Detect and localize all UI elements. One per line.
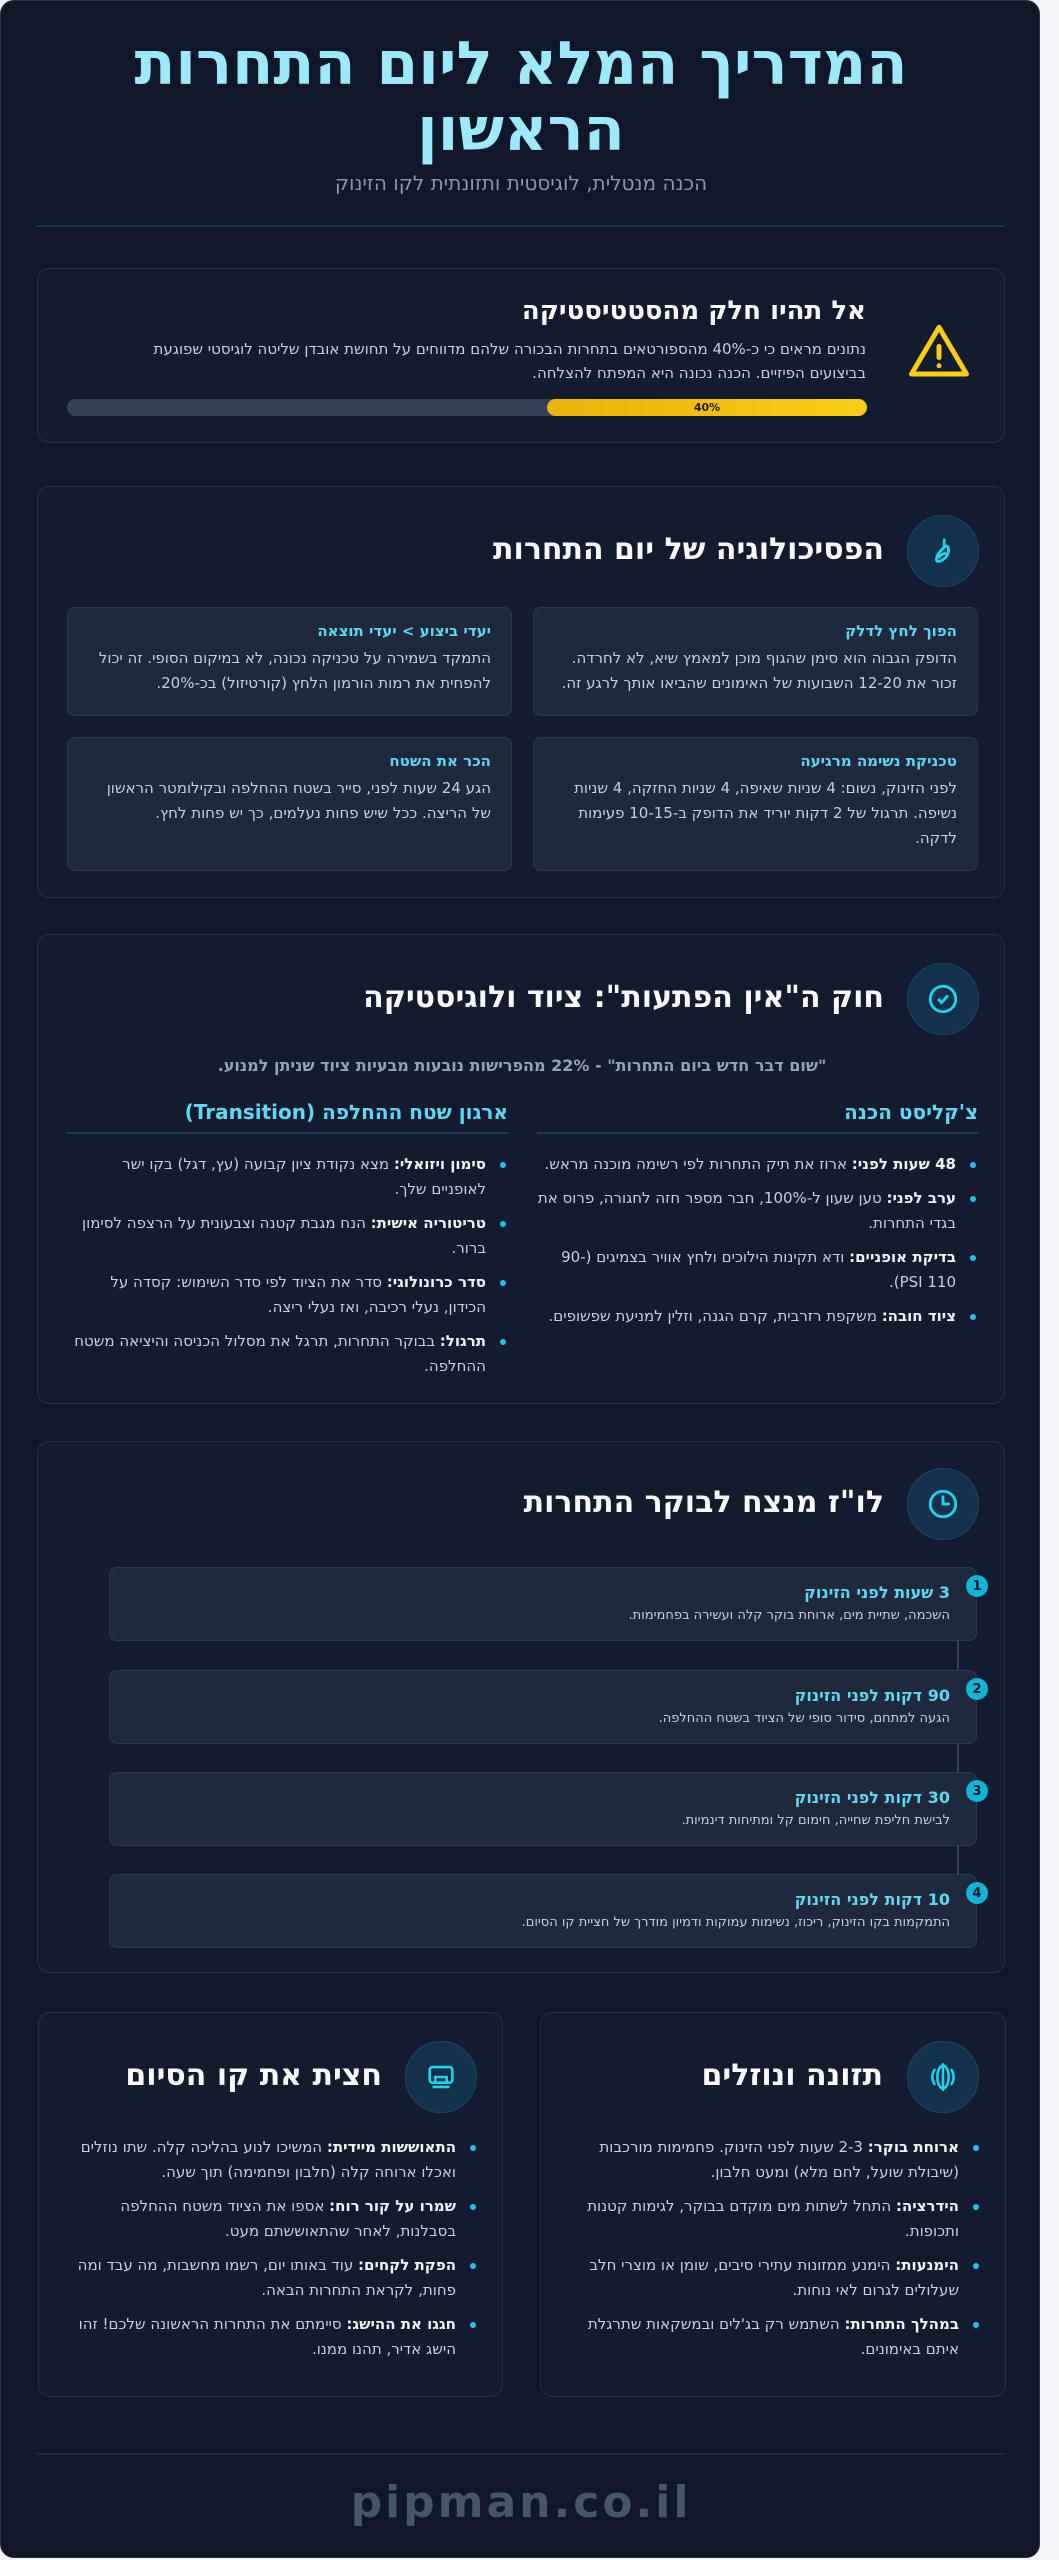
badge 4: 4 (972, 1886, 982, 1900)
heading: הפסיכולוגיה של יום התחרות (493, 532, 884, 567)
step 1: 3 שעות לפני הזינוק (804, 1583, 950, 1602)
icon: nutrition (907, 2041, 979, 2113)
bullets: שמרו על קור רוח: אספו את הציוד משטח ההחלפה בסבלנות, לאחר שהתאוששתם מעט. (120, 2197, 456, 2240)
timeline (109, 1567, 988, 1948)
bullets: במהלך התחרות: השתמש רק בג'לים ובמשקאות שתרגלת איתם באימונים. (588, 2315, 959, 2358)
title (134, 29, 908, 165)
column: transition area: טריטוריה אישית: הנח מגבת קטנה וצבעונית על הרצפה לסימון ברור. (82, 1214, 486, 1257)
heading: תזונה ונוזלים (701, 2058, 883, 2093)
step 1 (109, 1567, 977, 1641)
card: breathing: לפני הזינוק, נשום: 4 שניות שאיפה, 4 שניות החזקה, 4 שניות נשיפה. תרגול של 2 דקות יוריד את הדופק ב-10-15 פעימות לדקה. (574, 779, 957, 847)
badge 3 (966, 1780, 988, 1802)
step 2: הגעה למתחם, סידור סופי של הציוד בשטח ההחלפה. (659, 1711, 950, 1726)
card: performance goals: יעדי ביצוע > יעדי תוצאה (317, 622, 491, 640)
card: know the terrain: הגע 24 שעות לפני, סייר בשטח ההחלפה ובקילומטר הראשון של הריצה. ככל שיש פחות נעלמים, כך יש פחות לחץ. (107, 779, 491, 822)
progress bar 40% (67, 399, 867, 416)
card: stress to fuel: הפוך לחץ לדלק (845, 622, 957, 640)
panel: equipment & logistics (37, 934, 1005, 1404)
badge 1: 1 (972, 1578, 982, 1594)
subtitle: הכנה מנטלית, לוגיסטית ותזונתית לקו הזינוק (335, 171, 707, 195)
column: transition area: ארגון שטח ההחלפה (Transition) (185, 1100, 508, 1124)
step 3 (109, 1772, 977, 1846)
footer brand: pipman.co.il (351, 2477, 691, 2528)
column: checklist: ערב לפני: טען שעון ל-100%, חבר מספר חזה לחגורה, פרוס את בגדי התחרות. (538, 1189, 956, 1232)
card: stress to fuel (533, 607, 978, 716)
badge 2 (966, 1678, 988, 1700)
step 2 (109, 1670, 977, 1744)
bullets: התאוששות מיידית: המשיכו לנוע בהליכה קלה. שתו נוזלים ואכלו ארוחה קלה (חלבון ופחמימה) תוך שעה. (81, 2138, 456, 2181)
heading: אל תהיו חלק מהסטטיסטיקה (522, 296, 866, 326)
panel: nutrition (540, 2012, 1006, 2397)
card: breathing: טכניקת נשימה מרגיעה (800, 752, 957, 770)
badge 2: 2 (972, 1682, 982, 1696)
panel: finish line (38, 2012, 503, 2397)
bullets: חגגו את ההישג: סיימתם את התחרות הראשונה שלכם! זהו הישג אדיר, תהנו ממנו. (79, 2315, 456, 2358)
icon: finish (405, 2041, 477, 2113)
column: transition area: תרגול: בבוקר התחרות, תרגל את מסלול הכניסה והיציאה משטח ההחלפה. (74, 1332, 486, 1375)
text: נתונים מראים כי כ-40% מהספורטאים בתחרות הבכורה שלהם מדווחים על תחושת אובדן שליטה לוגיסטי שפוגעת בביצועים הפיזיים. הכנה נכונה היא המפתח להצלחה. (154, 340, 866, 382)
card: performance goals: התמקד בשמירה על טכניקה נכונה, לא במיקום הסופי. זה יכול להפחית את רמות הורמון הלחץ (קורטיזול) בכ-20%. (99, 649, 491, 692)
bullets: הימנעות: הימנע ממזונות עתירי סיבים, שומן או מוצרי חלב שעלולים לגרום לאי נוחות. (589, 2256, 959, 2299)
column: checklist (537, 1100, 978, 1325)
column: transition area: סדר כרונולוגי: סדר את הציוד לפי סדר השימוש: קסדה על הכידון, נעלי רכיבה, ואז נעלי ריצה. (110, 1273, 486, 1316)
bullets: הידרציה: התחל לשתות מים מוקדם בבוקר, לגימות קטנות ותכופות. (587, 2197, 959, 2240)
card: know the terrain: הכר את השטח (389, 752, 491, 770)
heading: לו"ז מנצח לבוקר התחרות (524, 1485, 884, 1520)
bullets (78, 2138, 476, 2358)
title: הראשון (417, 95, 625, 165)
column: checklist: בדיקת אופניים: ודא תקינות הילוכים ולחץ אוויר בצמיגים (90-110 PSI). (561, 1248, 956, 1291)
heading: חצית את קו הסיום (125, 2058, 382, 2093)
badge 3: 3 (972, 1784, 982, 1798)
heading: חוק ה"אין הפתעות": ציוד ולוגיסטיקה (363, 980, 884, 1015)
step 2: 90 דקות לפני הזינוק (795, 1686, 950, 1705)
column: transition area (67, 1100, 508, 1375)
column: checklist: צ'קליסט הכנה (844, 1100, 978, 1124)
panel: statistic warning (37, 268, 1005, 443)
card: breathing (533, 737, 978, 871)
badge 1 (966, 1575, 988, 1597)
icon: warning triangle (909, 324, 969, 376)
step 3: 30 דקות לפני הזינוק (795, 1788, 950, 1807)
badge 4 (966, 1882, 988, 1904)
step 3: לבישת חליפת שחייה, חימום קל ומתיחות דינמיות. (681, 1813, 950, 1828)
icon: clock (907, 1468, 979, 1540)
card: stress to fuel: הדופק הגבוה הוא סימן שהגוף מוכן למאמץ שיא, לא לחרדה. זכור את 12-20 השבועות של האימונים שהביאו אותך לרגע זה. (562, 649, 957, 692)
panel: race morning timeline (37, 1441, 1005, 1973)
bullets: ארוחת בוקר: 2-3 שעות לפני הזינוק. פחמימות מורכבות (שיבולת שועל, לחם מלא) ומעט חלבון. (599, 2138, 959, 2181)
bullets (587, 2138, 979, 2358)
title: המדריך המלא ליום התחרות (134, 29, 908, 99)
column: checklist: 48 שעות לפני: ארוז את תיק התחרות לפי רשימה מוכנה מראש. (544, 1155, 956, 1173)
progress bar 40%: 40% (694, 401, 720, 414)
step 4: 10 דקות לפני הזינוק (795, 1890, 950, 1909)
column: checklist: ציוד חובה: משקפת רזרבית, קרם הגנה, וזלין למניעת שפשופים. (548, 1307, 956, 1325)
column: transition area: סימון ויזואלי: מצא נקודת ציון קבועה (עץ, דגל) בקו ישר לאופניים שלך. (122, 1155, 486, 1198)
card: know the terrain (67, 737, 512, 871)
step 1: השכמה, שתיית מים, ארוחת בוקר קלה ועשירה בפחמימות. (629, 1608, 950, 1623)
bullets: הפקת לקחים: עוד באותו יום, רשמו מחשבות, מה עבד ומה פחות, לקראת התחרות הבאה. (78, 2256, 456, 2299)
card: performance goals (67, 607, 512, 716)
panel: psychology (37, 486, 1005, 898)
icon: check circle (907, 963, 979, 1035)
icon: flame (907, 515, 979, 587)
quote: "שום דבר חדש ביום התחרות" - 22% מהפרישות נובעות מבעיות ציוד שניתן למנוע. (218, 1056, 826, 1075)
step 4 (109, 1874, 977, 1948)
step 4: התמקמות בקו הזינוק, ריכוז, נשימות עמוקות ודמיון מודרך של חציית קו הסיום. (522, 1915, 950, 1930)
